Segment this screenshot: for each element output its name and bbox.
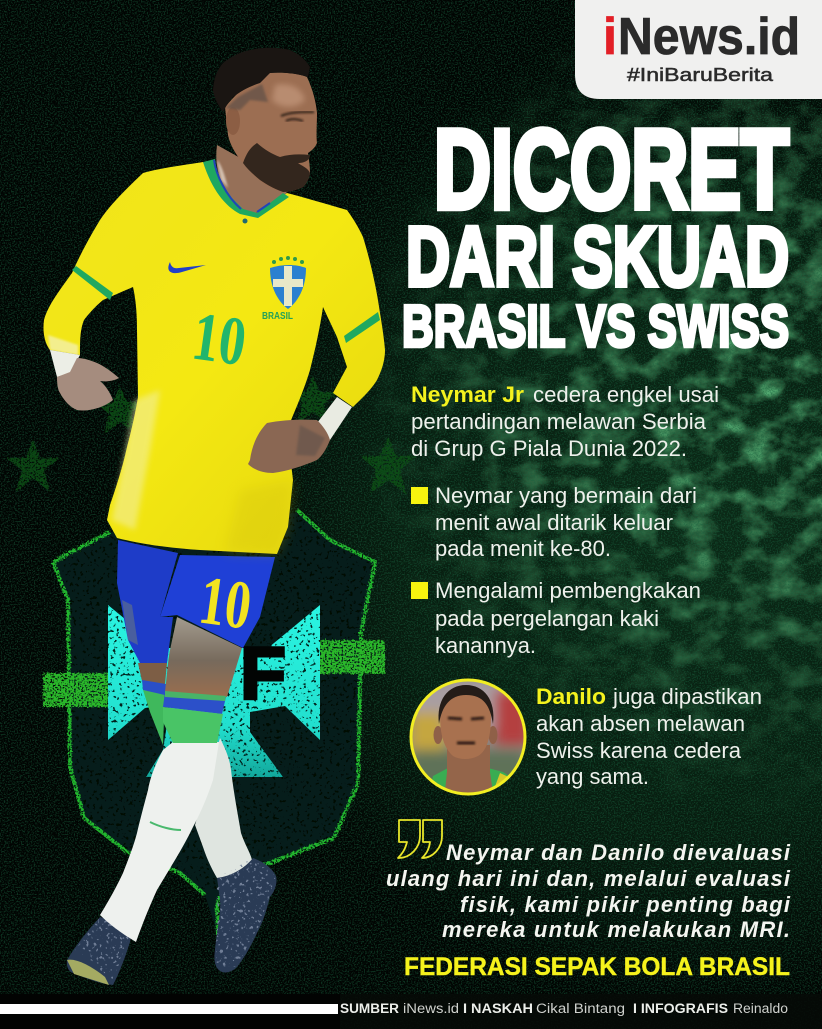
- Danilo text: juga dipastikan: [612, 684, 762, 709]
- near thigh: [165, 617, 242, 697]
- icon: quotation mark: [398, 820, 442, 858]
- right sleeve cuff: [344, 312, 380, 343]
- logo wordmark: i: [603, 8, 617, 66]
- footer credits: Reinaldo: [733, 1001, 788, 1016]
- jersey highlights: [112, 390, 160, 530]
- right hand: [248, 420, 330, 473]
- intro text: pertandingan melawan Serbia: [411, 409, 707, 434]
- Danilo text: yang sama.: [536, 764, 649, 789]
- face highlight: [272, 84, 305, 107]
- bullet one: pada menit ke-80.: [435, 536, 611, 561]
- footer credits: iNews.id: [403, 1001, 459, 1016]
- footer credits: SUMBER: [340, 1001, 399, 1016]
- crest teal cross: [108, 605, 320, 777]
- footer credits: I NASKAH: [463, 1001, 533, 1016]
- footer credits: [340, 1001, 788, 1016]
- intro text: cedera engkel usai: [533, 382, 719, 407]
- footer credits: Cikal Bintang: [536, 1001, 625, 1016]
- Danilo text: Swiss karena cedera: [536, 738, 742, 763]
- crest speckle: [108, 605, 320, 777]
- portrait ears: [434, 726, 442, 744]
- quote text: mereka untuk melakukan MRI.: [442, 917, 790, 942]
- near boot: [67, 917, 132, 985]
- logo wordmark: News.id: [618, 8, 800, 66]
- neck highlight: [217, 160, 228, 188]
- near boot texture: [75, 917, 130, 980]
- sock swoosh: [150, 822, 181, 830]
- portrait face: [440, 692, 491, 759]
- far thigh and sock: [138, 663, 167, 745]
- ear: [226, 107, 240, 135]
- shorts: [117, 540, 275, 663]
- near sock bands: [163, 691, 226, 743]
- bullet two: Mengalami pembengkakan: [435, 578, 701, 603]
- logo panel: [575, 0, 822, 99]
- portrait neck: [445, 745, 492, 792]
- footer rule: [0, 1004, 338, 1014]
- head: [213, 48, 317, 192]
- collar: [203, 159, 289, 218]
- Danilo text: Danilo: [536, 684, 606, 709]
- crest word: BRASIL: [262, 311, 293, 322]
- far lower leg: [195, 738, 252, 878]
- crest shield texture: [53, 510, 375, 895]
- boot stud plate: [67, 960, 109, 985]
- quote text: [386, 840, 791, 942]
- quote attribution: FEDERASI SEPAK BOLA BRASIL: [404, 953, 790, 981]
- portrait jersey: [432, 768, 508, 788]
- far boot: [214, 858, 277, 972]
- portrait hair: [439, 685, 493, 724]
- shorts number: 10: [195, 563, 256, 645]
- bullet one: menit awal ditarik keluar: [435, 510, 673, 535]
- portrait blurred backdrop: [412, 682, 524, 780]
- portrait: Danilo: [410, 680, 530, 800]
- Danilo text: [536, 684, 762, 789]
- quote text: Neymar dan Danilo dievaluasi: [446, 840, 791, 865]
- jersey shadow: [225, 480, 293, 554]
- face: [225, 73, 317, 192]
- background stars: [6, 376, 416, 494]
- bullet two: kanannya.: [435, 633, 536, 658]
- quote text: ulang hari ini dan, melalui evaluasi: [386, 866, 791, 891]
- placket button: [242, 218, 248, 224]
- crest stars: [272, 256, 304, 264]
- right wrist band: [317, 397, 352, 443]
- footer credits: I INFOGRAFIS: [633, 1001, 728, 1016]
- beard: [243, 143, 310, 192]
- Danilo text: akan absen melawan: [536, 711, 745, 736]
- intro text: Neymar Jr: [411, 382, 524, 407]
- bullet marker: [411, 487, 428, 504]
- jersey body and sleeves: [43, 162, 385, 554]
- portrait eyes and mouth: [448, 718, 484, 743]
- bullet two: [411, 578, 701, 658]
- crest green bars: [43, 640, 385, 707]
- collar trim: [214, 160, 270, 212]
- far boot texture: [216, 858, 276, 967]
- left sleeve cuff: [72, 266, 113, 300]
- bullet one: [411, 483, 697, 561]
- background crest: [43, 510, 385, 935]
- jersey number: 10: [188, 299, 251, 381]
- intro text: di Grup G Piala Dunia 2022.: [411, 436, 687, 461]
- hair: [213, 48, 310, 112]
- neck: [216, 145, 287, 213]
- nike swoosh: [168, 262, 206, 273]
- quote text: fisik, kami pikir penting bagi: [460, 892, 791, 917]
- fade: [226, 84, 268, 110]
- near white sock: [100, 742, 219, 942]
- bullet two: pada pergelangan kaki: [435, 606, 659, 631]
- intro text: [411, 382, 719, 461]
- jersey crest: [262, 256, 306, 322]
- right hand tattoos: [296, 425, 325, 456]
- eye and brow: [281, 112, 314, 121]
- left wrist and hand: [50, 350, 119, 411]
- bullet one: Neymar yang bermain dari: [435, 483, 697, 508]
- logo tagline: #IniBaruBerita: [627, 65, 774, 85]
- crest outline: [53, 510, 375, 935]
- bullet marker: [411, 582, 428, 599]
- crest letter: F: [240, 632, 286, 715]
- crest shield: [53, 510, 375, 935]
- player figure: [43, 48, 385, 985]
- title: [402, 107, 789, 360]
